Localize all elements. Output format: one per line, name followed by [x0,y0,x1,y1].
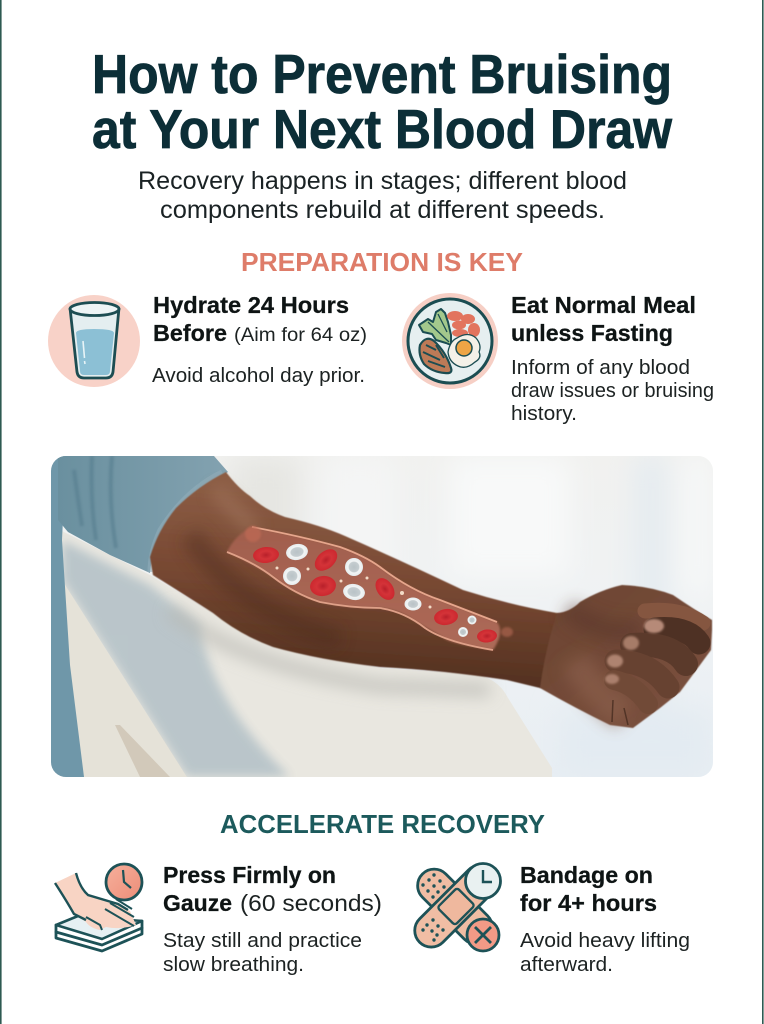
text: bandage [520,862,690,976]
text: bandage: Avoid heavy lifting [520,930,690,952]
forearm [150,472,558,689]
fist [540,585,712,728]
text: press firmly [163,862,382,976]
panel: press firmly [55,862,382,976]
text: bandage: afterward. [520,954,613,976]
title: at Your Next Blood Draw [92,98,672,160]
vein cross-section [227,526,513,650]
text: press firmly: (60 seconds) [240,890,382,916]
panel: meal [402,292,714,425]
text: press firmly: Gauze [163,890,232,916]
text: meal: Eat Normal Meal [511,292,696,318]
subtitle: components rebuild at different speeds. [160,196,605,224]
subtitle [138,167,627,224]
heading: accelerate recovery: ACCELERATE RECOVERY [220,809,545,839]
text: press firmly: Press Firmly on [163,862,336,888]
text: meal: history. [511,403,577,425]
text: bandage: Bandage on [520,862,653,888]
text: hydrate [152,292,367,387]
title: How to Prevent Bruising [92,43,672,105]
icon: glass of water [48,295,140,387]
blood cells [252,542,498,643]
panel: bandage [408,858,690,976]
armrest cushion [60,530,552,777]
text: hydrate: Before [153,320,227,346]
title [92,43,672,160]
text: hydrate: (Aim for 64 oz) [234,325,367,346]
icon: hand pressing gauze with clock [55,864,142,951]
text: meal [511,292,714,425]
icon: plate of food [402,293,498,389]
text: press firmly: slow breathing. [163,954,304,976]
text: press firmly: Stay still and practice [163,930,362,952]
sleeve [51,456,228,777]
text: hydrate: Hydrate 24 Hours [153,292,349,318]
text: meal: unless Fasting [511,320,673,346]
text: meal: draw issues or bruising [511,380,714,402]
icon: crossed bandages with clock and no-lifting mark [408,858,503,954]
heading: preparation is key: PREPARATION IS KEY [241,247,523,277]
text: hydrate: Avoid alcohol day prior. [152,365,365,387]
subtitle: Recovery happens in stages; different blood [138,167,627,195]
text: bandage: for 4+ hours [520,890,657,916]
photo: forearm with blood cells in vein [51,456,713,777]
panel: hydrate [48,292,367,387]
text: meal: Inform of any blood [511,357,690,379]
